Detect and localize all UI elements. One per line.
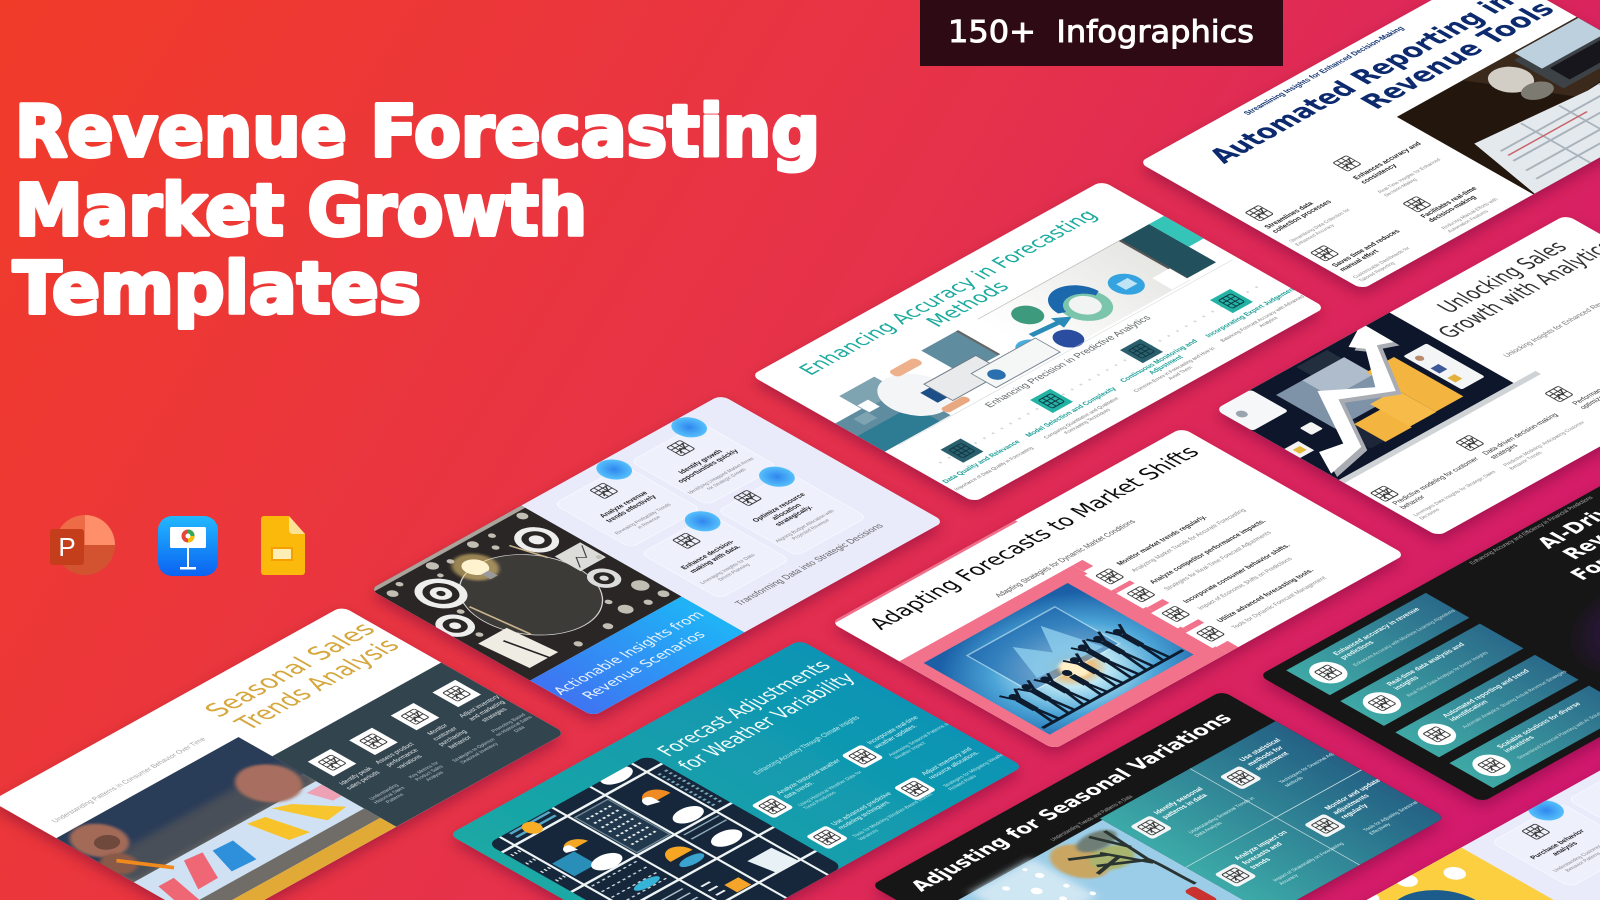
panel: slide Automated Reporting in Revenue Tools [1139, 0, 1600, 289]
item: Streamlines data collection processes [1245, 200, 1350, 246]
panel: dark steps: customer [431, 726, 460, 742]
bar: Scalable solutions for diverse industries [1449, 686, 1600, 788]
icon: Google Slides [261, 516, 305, 575]
item: Saves time and reduces manual effort: Tailored Reporting [1358, 261, 1397, 283]
grid: seasonal adjustments: Understanding Seasonal Trends in [1187, 796, 1257, 835]
title: Market Growth [15, 169, 587, 252]
item: Data-driven decision-making strategies [1456, 413, 1584, 470]
grid: seasonal adjustments: forecasts and [1241, 842, 1284, 866]
photo: tree through the seasons [927, 820, 1270, 900]
subtitle: Understanding Patterns in Consumer Behavior Over Time [51, 737, 208, 824]
photo: hands over printed bar chart [52, 737, 380, 900]
list: market shift actions: Strategies for Real-Time Forecast Adjustments [1163, 530, 1273, 592]
item: Data-driven decision-making strategies: Data-driven decision-making [1481, 412, 1560, 456]
item: Facilitates real-time decision-making: decision-making [1427, 195, 1478, 223]
bar: Automated reporting and trend identification: identification [1448, 699, 1490, 723]
item: Enhances accuracy and consistency: Real-Time Insights for Enhanced [1377, 158, 1443, 194]
panel: dark steps: Promoting Based [490, 713, 528, 734]
slide title: Unlocking Sales [1432, 238, 1574, 317]
panel: dark steps: Assess product [374, 742, 416, 765]
grid: seasonal adjustments: Methods [1284, 776, 1306, 788]
panel: dark steps: Seasonal Inventory [459, 742, 501, 765]
card: Optimize resource allocation strategically [720, 466, 864, 554]
item: Use advanced predictive modeling techniques: Variances [857, 828, 881, 842]
subtitle: Enhancing Precision in Predictive Analytics [982, 313, 1154, 409]
card: Enhance decision-making with data: Driven Planning [717, 563, 752, 582]
panel: slide Seasonal Sales Trends Analysis [0, 606, 565, 900]
panel: dark steps: strategies [480, 707, 509, 723]
panel: dark steps: on Historical Sales [494, 715, 535, 737]
item: Predictive modeling for customer behavior: Predictive modeling for customer [1391, 456, 1481, 506]
card: Optimize resource allocation strategically: Aligning Budget Allocation with [774, 509, 836, 544]
bar: Automated reporting and trend identification: Automated reporting and trend [1441, 669, 1532, 719]
panel: slide Enhancing Accuracy in Forecasting Methods [751, 179, 1328, 502]
item: Predictive modeling for customer behavior: Leverages Data Insights for Strategic Sales [1412, 470, 1498, 517]
item: Adjust inventory and resource allocations: Adjust inventory and [920, 746, 974, 777]
item: Facilitates real-time decision-making: Reducing Manual Efforts with [1440, 197, 1500, 230]
subtitle: Enhancing Accuracy Through Climate Insights [752, 715, 862, 776]
panel: slide Unlocking Sales Growth with Analytics [1210, 212, 1600, 536]
subtitle: Understanding Trends and Patterns in Data [1049, 794, 1135, 842]
card: Identify growth opportunities quickly: for Strategic Growth [706, 467, 748, 491]
list: market shift actions: Impact of Economic Shifts on Predictions [1196, 556, 1294, 611]
bar: Real-time data analysis and insights: Real-Time Data Analysis for Better Insights [1405, 651, 1491, 698]
card: Analyze revenue trends effectively: in Revenue [636, 515, 663, 530]
caption: Transforming Data into Strategic Decisions [732, 522, 886, 607]
grid: seasonal adjustments: patterns in data [1161, 793, 1210, 820]
panel: dark steps: behavior [447, 735, 474, 750]
item: Saves time and reduces manual effort: manual effort [1338, 249, 1381, 273]
item: Saves time and reduces manual effort: Saves time and reduces [1331, 229, 1402, 268]
item: Adjust inventory and resource allocations: Related Risks [947, 774, 979, 792]
card: Enhance decision-making with data: Leveraging Insights for Data- [699, 552, 758, 585]
list: market shift actions: Analyze competitor performance impacts. [1148, 519, 1268, 585]
slide title: Enhancing Accuracy in Forecasting [794, 207, 1103, 378]
icon: PowerPoint [50, 515, 115, 575]
item: Adjust inventory and resource allocations [893, 738, 1015, 806]
card: Enhance decision-making with data: Enhance decision- [680, 539, 737, 571]
grid: seasonal adjustments: trends [1249, 857, 1273, 870]
slide title: Adapting Forecasts to Market Shifts [863, 443, 1206, 633]
item: Data-driven decision-making strategies: strategies [1489, 443, 1520, 460]
item: Data Quality and Relevance: Importance of Data Quality in Forecasting [953, 446, 1036, 492]
item: Data-driven decision-making strategies: Behavior Trends [1508, 451, 1544, 471]
item: Adjust inventory and resource allocations: Strategies for Mitigating Weather- [942, 751, 1009, 788]
grid: seasonal adjustments: adjustment [1254, 751, 1291, 772]
card: Identify growth opportunities quickly [634, 417, 774, 504]
subtitle: Streamlining Insights for Enhanced Decision-Making [1241, 25, 1406, 116]
item: Model Selection and Complexity: Forecasting Techniques [1063, 408, 1113, 435]
card: Optimize resource allocation strategically: Projected Revenue [791, 518, 832, 541]
bar: Automated reporting and trend identification: Automate Analytics: Sharing Actual Revenue Strategies [1461, 669, 1569, 729]
bar: Enhanced accuracy in revenue predictions: Enhances Accuracy with Machine Learning Algorithms [1352, 609, 1458, 667]
footer strip [198, 818, 396, 900]
card: Identify growth opportunities quickly: Identify growth [677, 449, 725, 475]
item: Continuous Monitoring and Adjustment: Common Errors in Forecasting and How to [1133, 346, 1217, 393]
panel: dark steps: Strategies to Optimize [451, 737, 497, 763]
card: Purchase behavior analysis: analysis [1551, 841, 1580, 857]
item: Analyze historical weather data trends: Using Historical Weather Data for [797, 770, 864, 808]
grid: seasonal adjustments: Effectively [1368, 822, 1393, 836]
item: Incorporating Expert Judgement: Balancing Forecast Accuracy with Advanced [1219, 295, 1307, 343]
panel: slide AI-Driven Revenue Forecasting [1259, 477, 1600, 802]
item: Enhances accuracy and consistency: Enhances accuracy and [1352, 141, 1423, 181]
card: Optimize resource allocation strategically: allocation [770, 503, 803, 521]
item: Incorporate real-time weather updates: Incorporate real-time [865, 715, 921, 746]
panel: dark steps: and marketing [467, 699, 507, 722]
panel: dark steps: Analysis [425, 770, 446, 782]
bar: Real-time data analysis and insights: insights [1393, 675, 1421, 691]
item: Continuous Monitoring and Adjustment: Adjustment [1148, 354, 1186, 376]
card: Purchase behavior analysis [1477, 795, 1600, 887]
list: market shift actions: Analyzing Market Trends for Accurate Forecasting [1130, 507, 1248, 573]
list: market shift actions [1116, 508, 1326, 628]
bar: Automated reporting and trend identification [1395, 654, 1580, 757]
card: Analyze revenue trends effectively: Analyze revenue [598, 490, 650, 519]
card: Analyze revenue trends effectively: Revealing Profitability Trends [614, 502, 673, 536]
badge: 150+ Infographics: 150+ Infographics [948, 15, 1254, 50]
grid: seasonal adjustments [1100, 712, 1462, 900]
grid: seasonal adjustments: regularly [1339, 803, 1370, 820]
bar: Enhanced accuracy in revenue predictions [1286, 593, 1469, 695]
item: Streamlines data collection processes: Streamlining Data Collection for [1288, 208, 1352, 244]
list: market shift actions: Monitor market trends regularly. [1116, 515, 1209, 567]
slide title: Revenue Tools [1354, 0, 1563, 114]
item: Use advanced predictive modeling techniques: modeling techniques. [837, 799, 893, 831]
list: market shift actions: Tools for Dynamic Forecast Management [1230, 575, 1329, 630]
icon: Keynote [158, 516, 218, 576]
item: Incorporate real-time weather updates [841, 707, 961, 774]
item: Facilitates real-time decision-making [1403, 187, 1498, 233]
item: Use advanced predictive modeling techniques: Tools for Modeling Weather-Based Market [851, 792, 935, 839]
item: Saves time and reduces manual effort: Customizable Dashboards for [1352, 246, 1412, 280]
illustration: predictive analytics band [835, 216, 1216, 452]
bar: Real-time data analysis and insights: Real-time data analysis and [1386, 642, 1467, 687]
card: second column [1568, 761, 1600, 845]
grid: seasonal adjustments: Monitor and update [1323, 778, 1383, 811]
item: Streamlines data collection processes: collection processes [1271, 199, 1334, 234]
item: Adjust inventory and resource allocations: resource allocations. [927, 750, 982, 781]
item: Data Quality and Relevance: Data Quality and Relevance [941, 439, 1023, 485]
item: Enhances accuracy and consistency [1333, 141, 1440, 197]
item: Model Selection and Complexity: Model Selection and Complexity [1025, 386, 1118, 438]
illustration: business gadgets and light bulb [368, 505, 682, 682]
panel: dark steps: Product Sales [414, 764, 446, 782]
panel: dark steps: Key Metrics for [408, 761, 441, 779]
item: Use advanced predictive modeling techniques [805, 780, 940, 855]
panel: slide Purchase behavior analysis [1300, 731, 1600, 900]
item: Streamlines data collection processes: Streamlines data [1263, 201, 1316, 230]
card: Analyze revenue trends effectively [557, 460, 698, 546]
bar: Enhanced accuracy in revenue predictions: Enhanced accuracy in revenue [1332, 607, 1422, 657]
item: Analyze historical weather data trends: Analyze historical weather [775, 758, 843, 796]
item: Performance metrics optimization [1545, 386, 1600, 409]
panel: slide Adapting Forecasts to Market Shifts [831, 428, 1405, 749]
list: market shift actions: Incorporate consumer behavior shifts. [1182, 543, 1292, 604]
slide title: Forecast Adjustments [652, 657, 836, 760]
card: Identify growth opportunities quickly: opportunities quickly [676, 449, 741, 484]
panel: slide Adjusting for Seasonal Variations [871, 681, 1462, 900]
pink frame with notched icon tabs [899, 554, 1248, 749]
banner [530, 597, 745, 716]
panel: slide Actionable Insights from Revenue Scenarios [368, 395, 944, 718]
item: Predictive modeling for customer behavior: behavior [1399, 494, 1428, 510]
item: Incorporating Expert Judgement: Incorporating Expert Judgement [1204, 286, 1299, 339]
card: Enhance decision-making with data: making with data. [689, 544, 743, 574]
banner title: Actionable Insights from [550, 609, 709, 697]
title: Revenue Forecasting [15, 90, 820, 173]
illustration: market burst with silhouettes [924, 583, 1194, 735]
card: Identify growth opportunities quickly: Identifying Untapped Market Areas [686, 457, 756, 495]
item: Incorporate real-time weather updates: weather updates. [872, 723, 919, 750]
item: Continuous Monitoring and Adjustment: Continuous Monitoring and [1119, 339, 1200, 384]
panel: dark steps: Historical Sales [373, 786, 407, 805]
bar: Real-time data analysis and insights [1340, 624, 1524, 726]
slide title: Seasonal Sales [197, 618, 382, 721]
photo: desk with reports [1397, 17, 1600, 194]
grid: seasonal adjustments: Use statistical [1238, 738, 1283, 763]
slide title: Trends Analysis [227, 634, 406, 734]
grid: seasonal adjustments: Accuracy [1278, 873, 1301, 886]
item: Data-driven decision-making strategies: Predictive Modeling: Anticipating Customer [1502, 420, 1587, 468]
badge: 150+ Infographics [920, 0, 1283, 66]
card: Optimize resource allocation strategically: Optimize resource [751, 492, 808, 523]
item: Facilitates real-time decision-making: Facilitates real-time [1420, 186, 1479, 219]
item: Model Selection and Complexity: Comparing Quantitative and Qualitative [1043, 396, 1121, 440]
bar: Enhanced accuracy in revenue predictions: predictions [1339, 640, 1376, 661]
panel: dark steps: Data [513, 725, 527, 733]
panel: dark steps: Monitor [426, 723, 451, 736]
item: Use advanced predictive modeling techniques: Use advanced predictive [830, 791, 894, 827]
item: Predictive modeling for customer behavior: Decisions [1418, 507, 1442, 521]
item: Enhances accuracy and consistency: Decision-Making [1383, 178, 1419, 198]
item: Incorporate real-time weather updates: Weather Impact [893, 741, 928, 761]
panel: dark steps: purchasing [437, 729, 469, 747]
slide title: Adjusting for Seasonal Variations [905, 710, 1238, 895]
subtitle: Adapting Strategies for Dynamic Market Conditions [992, 518, 1138, 599]
card: Enhance decision-making with data [644, 511, 787, 597]
item: Saves time and reduces manual effort [1310, 230, 1410, 282]
panel: dark steps: Adjust inventory [458, 694, 502, 719]
panel: dark steps: Patterns [385, 792, 406, 804]
card: Purchase behavior analysis: Purchase behavior [1529, 829, 1587, 861]
bar: Scalable solutions for diverse industries: Scalable solutions for diverse [1496, 701, 1583, 750]
grid: seasonal adjustments: methods for [1246, 745, 1286, 767]
card: Optimize resource allocation strategically: strategically. [774, 505, 815, 528]
item: Streamlines data collection processes: Enhanced Accuracy [1294, 223, 1337, 247]
card: Analyze revenue trends effectively: trends effectively [605, 494, 658, 524]
item: Facilitates real-time decision-making: Automation Features [1446, 209, 1491, 234]
item: Enhances accuracy and consistency: consistency [1360, 163, 1399, 185]
item: Continuous Monitoring and Adjustment: Avoid Them [1167, 366, 1195, 381]
panel: dark steps: Understanding [368, 783, 401, 801]
item: Analyze historical weather data trends: data trends. [782, 781, 816, 800]
grid: seasonal adjustments: Techniques for Seasonal Adjustment [1278, 744, 1351, 785]
item: Incorporating Expert Judgement: Analytics [1258, 316, 1280, 328]
illustration: weather dashboard grid [482, 752, 843, 900]
item: Analyze historical weather data trends: Trend Prediction [802, 791, 838, 811]
list: market shift actions: Utilize advanced forecasting tools. [1216, 568, 1316, 624]
grid: seasonal adjustments: Impact of Seasonality on Forecasting [1272, 842, 1346, 883]
slide title: Methods [921, 278, 1015, 330]
grid: seasonal adjustments: Data Analysis [1193, 821, 1224, 838]
panel: slide Forecast Adjustments for Weather Variability [449, 637, 1028, 900]
banner title: Revenue Scenarios [579, 629, 710, 702]
icon: PowerPoint: P [58, 532, 76, 562]
bar: Scalable solutions for diverse industries: industries [1503, 735, 1537, 754]
grid: seasonal adjustments: Identify seasonal [1153, 786, 1205, 816]
slide title: for Weather Variability [672, 669, 861, 774]
panel: dark steps: variations [395, 754, 424, 770]
illustration: yellow customer wheel [1300, 842, 1600, 900]
panel: dark steps: performance [384, 748, 421, 768]
subtitle: Enhancing Accuracy and Efficiency in Financial Predictions [1469, 496, 1595, 566]
panel: dark steps [272, 663, 565, 827]
item: Incorporate real-time weather updates: Assessing Seasonal Patterns and [887, 720, 955, 757]
item: Analyze historical weather data trends [751, 758, 870, 824]
panel: dark steps: sales periods [345, 770, 382, 791]
item: Predictive modeling for customer behavior [1370, 457, 1496, 520]
panel: dark steps: Identify peak [338, 766, 375, 786]
illustration: laptop with rising arrow [1219, 312, 1541, 483]
title: Templates [13, 247, 421, 330]
grid: seasonal adjustments: adjustments [1331, 793, 1372, 816]
grid: seasonal adjustments: Analyze impact on [1233, 830, 1289, 861]
grid: seasonal adjustments: Tools for Adjusting Seasonal Patterns [1362, 791, 1437, 833]
